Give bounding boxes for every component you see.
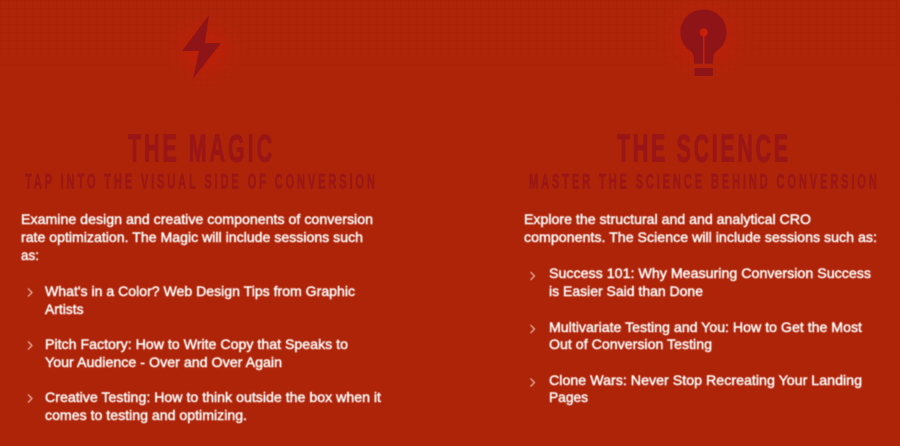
list item: multivariate testing: Multivariate Testing and You: How to Get the Most: [549, 320, 862, 335]
subheading: magic: TAP INTO THE VISUAL SIDE OF CONVERSION: [25, 168, 375, 194]
list item: creative testing: Creative Testing: How to think outside the box when it: [45, 390, 381, 405]
list item: success 101: is Easier Said than Done: [549, 284, 703, 299]
list item: clone wars: [530, 373, 862, 405]
list item: multivariate testing: Out of Conversion Testing: [549, 337, 712, 352]
list item: color: What's in a Color? Web Design Tips from Graphic: [45, 284, 355, 299]
list item: pitch factory: Pitch Factory: How to Write Copy that Speaks to: [45, 337, 348, 352]
panel: the science: [524, 0, 877, 405]
text block: science intro: Explore the structural and and analytical CRO: [524, 212, 811, 227]
list item: clone wars: Clone Wars: Never Stop Recreating Your Landing: [549, 373, 862, 388]
list: science sessions: [530, 266, 871, 405]
text block: magic intro: [21, 212, 373, 263]
list item: color: Artists: [45, 302, 84, 317]
text block: magic intro: as:: [21, 248, 39, 263]
background grid: [0, 0, 900, 29]
text block: science intro: [524, 212, 877, 245]
text block: magic intro: Examine design and creative components of conversion: [21, 212, 373, 227]
subheading: science: MASTER THE SCIENCE BEHIND CONVERSION: [529, 168, 877, 194]
panel: the magic: [21, 6, 381, 423]
list item: success 101: [530, 266, 871, 299]
list item: multivariate testing: [530, 320, 862, 352]
heading: the magic: THE MAGIC: [128, 127, 272, 170]
list item: pitch factory: Your Audience - Over and Over Again: [45, 355, 282, 370]
list item: creative testing: comes to testing and optimizing.: [45, 408, 247, 423]
list item: success 101: Success 101: Why Measuring Conversion Success: [549, 266, 871, 281]
list item: color: [28, 284, 355, 317]
list item: clone wars: Pages: [549, 390, 588, 405]
list item: pitch factory: [28, 337, 348, 370]
list item: creative testing: [28, 390, 381, 423]
text block: science intro: components. The Science will include sessions such as:: [524, 230, 877, 245]
text block: magic intro: rate optimization. The Magic will include sessions such: [21, 230, 363, 245]
heading: the science: THE SCIENCE: [617, 127, 788, 170]
icon: lightning bolt: [160, 6, 248, 94]
icon: light bulb: [652, 0, 756, 90]
list: magic sessions: [28, 284, 381, 423]
